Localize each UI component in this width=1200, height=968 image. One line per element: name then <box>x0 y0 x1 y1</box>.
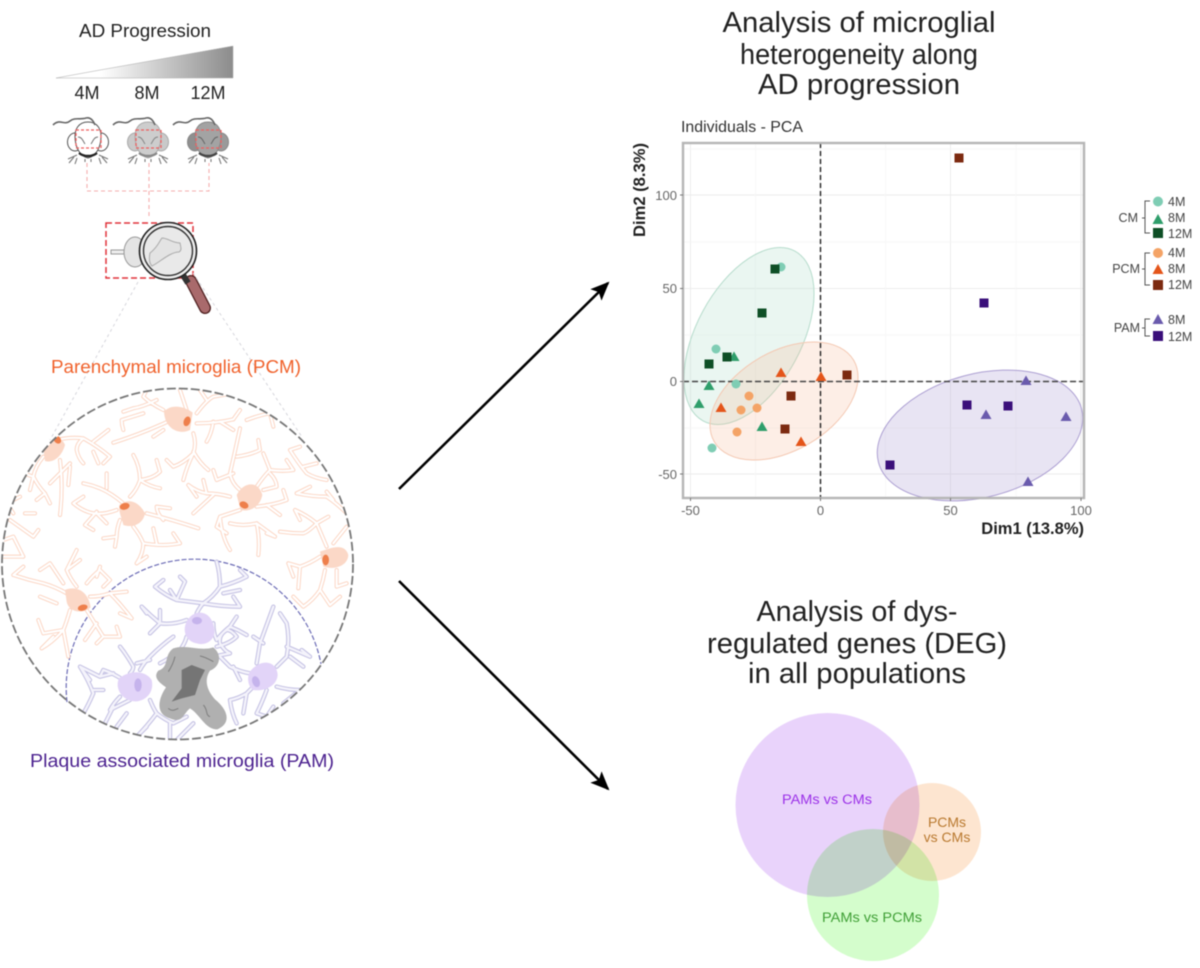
chart: PCA scatter plot: 100 <box>1070 503 1092 518</box>
points: PCM 8M <box>716 368 826 446</box>
arrow: to PCA analysis <box>399 283 608 489</box>
legend: groups and ages: 8M <box>1168 211 1185 225</box>
title: DEG analysis: regulated genes (DEG) <box>707 628 1007 660</box>
points: PAM 12M <box>886 298 1012 470</box>
chart: PCA scatter plot: Dim2 (8.3%) <box>631 143 649 237</box>
points: CM 12M <box>704 264 780 368</box>
age labels: 4M <box>74 83 100 103</box>
chart: PCA scatter plot: 50 <box>663 281 677 296</box>
legend: groups and ages <box>1112 195 1192 344</box>
chart: PCA scatter plot: 100 <box>655 188 677 203</box>
title: PCA analysis <box>722 7 996 101</box>
points: PCM 4M <box>732 392 762 436</box>
PAM region boundary <box>66 559 321 702</box>
heading: AD progression: AD Progression <box>79 20 211 41</box>
points: CM 8M <box>694 352 768 431</box>
chart: PCA scatter plot: 50 <box>943 503 958 518</box>
legend: groups and ages: 8M <box>1168 313 1185 327</box>
ellipse: CM group <box>657 226 841 446</box>
points: PAM 8M <box>980 376 1072 486</box>
chart: PCA scatter plot: 0 <box>670 374 677 389</box>
icon: 4M mouse <box>53 118 108 164</box>
amyloid plaque <box>156 647 227 729</box>
title: DEG analysis <box>707 596 1007 690</box>
age labels: 12M <box>190 83 226 103</box>
title: PCA analysis: Analysis of microglial <box>722 7 996 39</box>
PCM microglia cells <box>3 390 347 607</box>
title: PCA analysis: heterogeneity along <box>740 39 978 71</box>
points: CM 4M <box>708 262 786 452</box>
zoom guide lines <box>50 273 302 440</box>
chart: Venn diagram: PAMs vs PCMs <box>822 910 922 925</box>
title: PCA analysis: AD progression <box>758 69 960 101</box>
chart: PCA scatter plot: 0 <box>817 503 824 518</box>
chart: PCA scatter plot <box>631 119 1097 538</box>
title: DEG analysis: in all populations <box>748 658 966 690</box>
chart: PCA scatter plot: Individuals - PCA <box>681 119 804 136</box>
legend: groups and ages: PCM <box>1112 262 1140 276</box>
progression gradient wedge <box>56 46 233 78</box>
icon: 12M mouse <box>173 118 228 164</box>
legend: groups and ages: 8M <box>1168 262 1185 276</box>
icon: magnified brain <box>106 222 205 308</box>
chart: Venn diagram: PAMs vs CMs <box>782 792 872 807</box>
points: PCM 12M <box>780 154 964 434</box>
age labels: 8M <box>134 83 160 103</box>
dashed connector from mice to brain <box>87 163 209 219</box>
chart: PCA scatter plot: -50 <box>681 503 700 518</box>
legend: groups and ages: 4M <box>1168 246 1185 260</box>
panel: microglia tissue circle <box>2 388 353 740</box>
legend: groups and ages: CM <box>1119 211 1138 225</box>
frame <box>683 143 1084 498</box>
legend: groups and ages: PAM <box>1114 321 1140 335</box>
legend: groups and ages: 12M <box>1168 330 1192 344</box>
PAM microglia cells <box>80 562 310 740</box>
arrow: to DEG analysis <box>399 581 608 789</box>
chart: Venn diagram <box>736 713 981 961</box>
chart: PCA scatter plot: -50 <box>658 467 677 482</box>
chart: Venn diagram: PCMs <box>928 814 966 830</box>
reference lines <box>820 143 822 498</box>
label: parenchymal microglia: Parenchymal microglia (PCM) <box>51 356 301 377</box>
ellipse: PAM group <box>863 349 1097 522</box>
ellipse: PCM group <box>689 318 879 484</box>
grid <box>683 143 1084 498</box>
axis ticks <box>680 195 1081 501</box>
axis titles: Dim1 (13.8%) <box>981 520 1084 538</box>
chart: Venn diagram: vs CMs <box>924 829 970 845</box>
icon: 8M mouse <box>113 118 168 164</box>
label: plaque associated microglia: Plaque associated microglia (PAM) <box>30 750 334 771</box>
legend: groups and ages: 12M <box>1168 278 1192 292</box>
PCM cell bodies and lower left cell <box>13 407 348 657</box>
age labels <box>74 83 226 103</box>
legend: groups and ages: 4M <box>1168 195 1185 209</box>
title: DEG analysis: Analysis of dys- <box>756 596 958 628</box>
legend: groups and ages: 12M <box>1168 227 1192 241</box>
